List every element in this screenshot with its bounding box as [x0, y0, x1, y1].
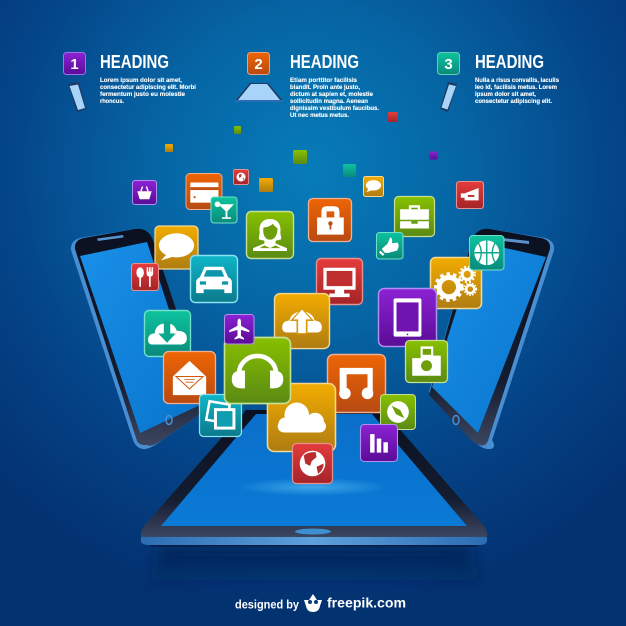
designed by: designed by [235, 600, 300, 612]
number badge 3: 3 [444, 56, 453, 73]
icon: freepik logo [304, 594, 322, 612]
icon: cloud [268, 384, 336, 452]
text block 3: Nulla a risus convallis, iaculis [475, 77, 559, 84]
text block 1 [100, 77, 196, 105]
icon: envelope [164, 352, 216, 404]
text block 1: fermentum justo eu molestie [100, 91, 185, 98]
icon: cloud download [144, 310, 190, 356]
number badge 2: 2 [254, 56, 263, 73]
left phone [71, 229, 209, 449]
mini phone icon 3 [440, 82, 457, 112]
text block 2: dignissim vestibulum faucibus. [290, 105, 379, 112]
icon: person [246, 212, 294, 258]
text block 1: Lorem ipsum dolor sit amet, [100, 77, 182, 84]
mini phone icon 1 [68, 82, 86, 112]
icon: monitor [316, 258, 362, 304]
text block 2 [290, 77, 379, 119]
text block 3: consectetur adipiscing elit. [475, 98, 552, 105]
icon: fork and spoon [132, 264, 158, 290]
icon: speech bubble [155, 226, 198, 269]
icon: camera [406, 340, 448, 382]
icon: credit card [186, 174, 222, 210]
icon: speech bubble small [364, 176, 384, 196]
heading 1: HEADING [100, 51, 169, 72]
text block 3 [475, 77, 559, 105]
icon: video camera [456, 182, 484, 208]
footer credit [235, 594, 406, 612]
text block 2: Ut nec metus metus. [290, 112, 349, 119]
step 1 block [64, 51, 196, 112]
icon: shopping basket [132, 180, 156, 204]
right phone [429, 229, 554, 449]
icon: music note [328, 354, 386, 412]
freepik.com: freepik.com [327, 594, 406, 610]
icon: padlock [308, 198, 352, 242]
icon: car [190, 256, 238, 302]
heading 2: HEADING [290, 51, 359, 72]
mini tablet icon [235, 83, 283, 102]
icon: globe [292, 444, 332, 484]
icon: compass [380, 394, 416, 430]
text block 3: leo id, facilisis metus. Lorem [475, 84, 557, 91]
icon: airplane [224, 314, 254, 344]
home button [295, 528, 331, 534]
text block 2: dictum at sapien et, molestie [290, 91, 373, 98]
text block 2: Etiam porttitor facilisis [290, 77, 357, 84]
icon: cocktail [211, 197, 237, 223]
text block 1: rhoncus. [100, 98, 124, 105]
step 2 block [235, 51, 379, 119]
icon: tablet device [378, 288, 436, 346]
text block 2: sollicitudin magna. Aenean [290, 98, 368, 105]
icon: globe small [234, 170, 248, 184]
icon: cloud upload [274, 294, 330, 348]
step 3 block [438, 51, 559, 112]
icon: bar chart [360, 424, 398, 462]
icon: basketball [470, 236, 504, 270]
tablet shadow [145, 546, 485, 590]
text block 3: ipsum dolor sit amet, [475, 91, 536, 98]
heading 3: HEADING [475, 51, 544, 72]
icon: pictures [200, 394, 242, 436]
icon: thumbs up [376, 232, 403, 259]
text block 1: consectetur adipiscing elit. Morbi [100, 84, 196, 91]
icon: headphones [224, 338, 290, 404]
number badge 1: 1 [70, 56, 79, 73]
icon: gears [430, 258, 482, 308]
main tablet [141, 410, 487, 546]
screen glow [238, 478, 388, 496]
floating small squares [165, 112, 438, 192]
text block 2: blandit. Proin ante justo, [290, 84, 360, 91]
icon: briefcase [394, 196, 434, 236]
number badge 2 [248, 52, 270, 74]
